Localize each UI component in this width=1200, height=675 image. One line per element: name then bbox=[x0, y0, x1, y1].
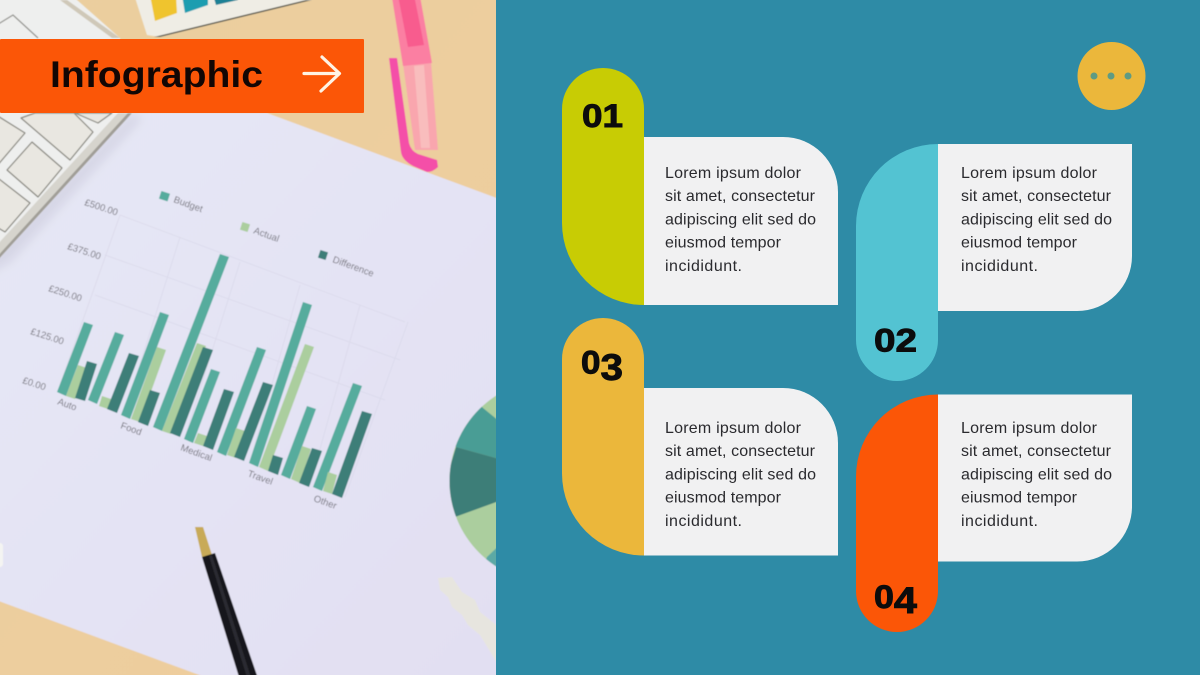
paper sheet bbox=[0, 113, 510, 675]
legend bbox=[159, 191, 375, 280]
text 02: eiusmod tempor bbox=[961, 235, 1078, 252]
title banner bbox=[0, 39, 364, 113]
legend: Budget bbox=[172, 194, 204, 215]
text 01: eiusmod tempor bbox=[665, 235, 782, 252]
text 03: sit amet, consectetur bbox=[665, 443, 816, 460]
chart grid bbox=[106, 255, 107, 256]
text 04 bbox=[961, 420, 1112, 530]
text 03: adipiscing elit sed do bbox=[665, 466, 816, 483]
colored tab 03 bbox=[562, 318, 644, 556]
icon: more dots bbox=[1078, 42, 1146, 110]
axis labels: £250.00 bbox=[47, 283, 83, 304]
text 03: Lorem ipsum dolor bbox=[665, 420, 802, 437]
text card 02 bbox=[938, 144, 1132, 311]
text 04: incididunt. bbox=[961, 513, 1038, 530]
text 03: incididunt. bbox=[665, 513, 742, 530]
axis labels: Medical bbox=[179, 442, 214, 464]
text 01: Lorem ipsum dolor bbox=[665, 165, 802, 182]
colored tab 02 bbox=[856, 144, 938, 381]
bars: difference bbox=[75, 347, 372, 498]
text 01 bbox=[665, 165, 816, 275]
axis labels: £500.00 bbox=[83, 197, 119, 218]
panel: item 03 bbox=[562, 318, 838, 556]
number 01: 01 bbox=[582, 98, 623, 134]
text 04: eiusmod tempor bbox=[961, 490, 1078, 507]
pie chart bbox=[449, 395, 496, 567]
axis labels: Other bbox=[312, 493, 338, 512]
text 03 bbox=[665, 420, 816, 530]
black pen bbox=[195, 527, 262, 675]
keyboard shadow on paper bbox=[0, 113, 142, 275]
text 02: Lorem ipsum dolor bbox=[961, 165, 1098, 182]
text 03: eiusmod tempor bbox=[665, 490, 782, 507]
text 04: adipiscing elit sed do bbox=[961, 466, 1112, 483]
panel: item 02 bbox=[856, 144, 1132, 381]
axis labels: Auto bbox=[56, 396, 78, 414]
silver key bbox=[438, 577, 496, 661]
text 01: sit amet, consectetur bbox=[665, 188, 816, 205]
legend: Actual bbox=[252, 225, 281, 245]
axis labels: £375.00 bbox=[66, 241, 102, 262]
text card 04 bbox=[938, 394, 1132, 562]
axis labels: £125.00 bbox=[29, 326, 65, 347]
number 04: 0 bbox=[874, 579, 892, 615]
icon: arrow bbox=[304, 57, 340, 91]
axis labels bbox=[21, 197, 338, 512]
colored tab 01 bbox=[562, 68, 644, 305]
text 01: adipiscing elit sed do bbox=[665, 211, 816, 228]
calculator bbox=[135, 0, 312, 38]
number 03: 0 bbox=[581, 344, 599, 380]
photo contents bbox=[0, 0, 515, 675]
panel: item 04 bbox=[856, 394, 1132, 632]
teal background panel bbox=[496, 0, 1200, 675]
axis labels: Travel bbox=[246, 468, 274, 488]
keyboard bbox=[0, 0, 132, 274]
title text: Infographic bbox=[50, 54, 263, 95]
small white object at left edge bbox=[0, 543, 3, 567]
axis labels: £0.00 bbox=[21, 375, 47, 393]
text 04: sit amet, consectetur bbox=[961, 443, 1112, 460]
colored tab 04 bbox=[856, 394, 938, 632]
text 02: adipiscing elit sed do bbox=[961, 211, 1112, 228]
text card 03 bbox=[644, 388, 838, 556]
number 02: 02 bbox=[874, 322, 917, 358]
text 01: incididunt. bbox=[665, 258, 742, 275]
text 04: Lorem ipsum dolor bbox=[961, 420, 1098, 437]
text 02: incididunt. bbox=[961, 258, 1038, 275]
text 02: sit amet, consectetur bbox=[961, 188, 1112, 205]
text 02 bbox=[961, 165, 1112, 275]
text card 01 bbox=[644, 137, 838, 305]
highlighter pen bbox=[389, 0, 438, 172]
legend: Difference bbox=[331, 254, 375, 280]
bar chart bbox=[21, 191, 408, 512]
number 04: 4 bbox=[894, 580, 917, 621]
number 03: 3 bbox=[600, 347, 623, 388]
panel: item 01 bbox=[562, 68, 838, 305]
axis labels: Food bbox=[119, 420, 143, 438]
photo: desk with financial chart bbox=[0, 0, 515, 675]
bars: budget bbox=[57, 254, 362, 491]
bars: actual bbox=[66, 343, 337, 494]
